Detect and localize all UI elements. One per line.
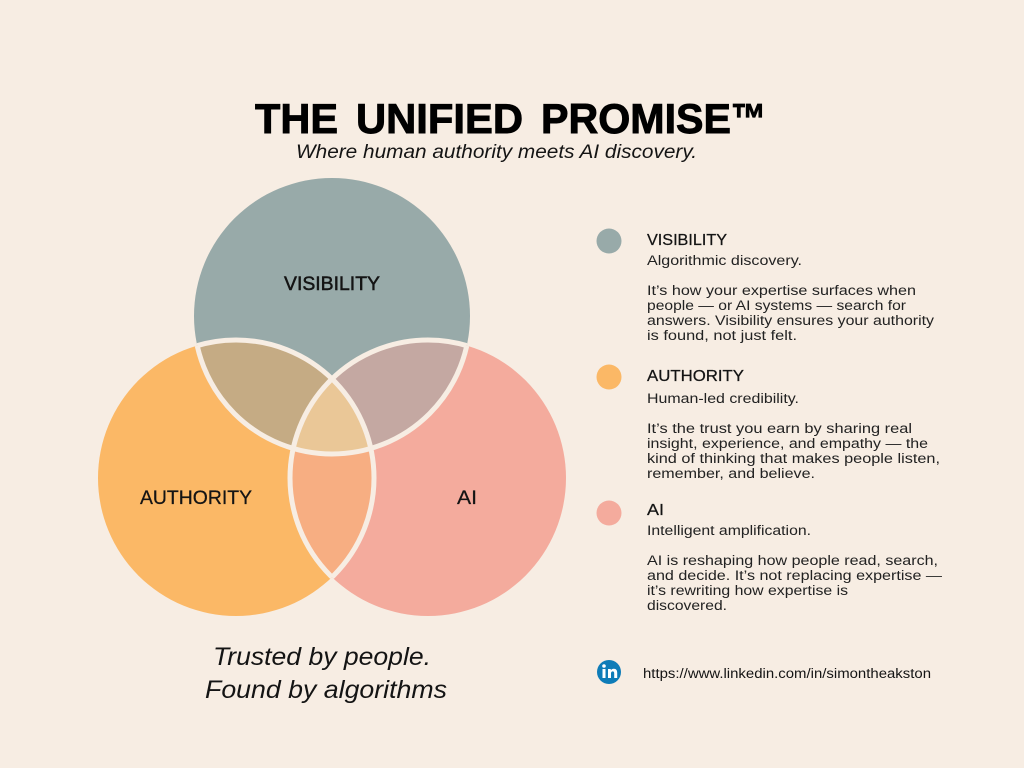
- overlap: authority and AI: [292, 452, 372, 574]
- subtitle: Where human authority meets AI discovery.: [296, 142, 697, 163]
- title: PROMISE: [541, 95, 731, 142]
- legend text: AI: AI is reshaping how people read, search,: [647, 553, 938, 568]
- label: visibility: VISIBILITY: [284, 273, 380, 295]
- title: [255, 95, 766, 142]
- title: THE: [255, 95, 338, 142]
- legend text: visibility: is found, not just felt.: [647, 328, 797, 343]
- title: UNIFIED: [356, 95, 523, 142]
- overlap: visibility and authority: [200, 342, 328, 446]
- legend text: AI: it’s rewriting how expertise is: [647, 583, 848, 598]
- legend text: AI: and decide. It’s not replacing expertise —: [647, 568, 943, 583]
- linkedin url: https://www.linkedin.com/in/simontheakston: [643, 666, 931, 681]
- tagline: Trusted by people.: [213, 643, 431, 671]
- legend text: authority: Human-led credibility.: [647, 391, 799, 406]
- legend text: authority: [647, 391, 940, 481]
- venn diagram: [98, 178, 566, 616]
- legend text: AI: [647, 523, 943, 613]
- legend text: visibility: Algorithmic discovery.: [647, 253, 802, 268]
- legend text: authority: remember, and believe.: [647, 466, 815, 481]
- title: ™: [731, 95, 766, 142]
- label: authority: AUTHORITY: [140, 487, 252, 509]
- legend text: authority: insight, experience, and empathy — the: [647, 436, 928, 451]
- legend item: AI: [596, 500, 943, 613]
- overlap: all three: [296, 382, 368, 452]
- tagline: [205, 643, 447, 704]
- legend text: visibility: answers. Visibility ensures your authority: [647, 313, 934, 328]
- legend dot: AI: [596, 500, 622, 526]
- legend text: authority: kind of thinking that makes people listen,: [647, 451, 940, 466]
- legend heading: authority: AUTHORITY: [647, 368, 744, 385]
- tagline: Found by algorithms: [205, 676, 447, 704]
- legend text: AI: discovered.: [647, 598, 727, 613]
- overlap: visibility and AI: [336, 342, 464, 446]
- legend dot: visibility: [596, 228, 622, 254]
- legend text: visibility: people — or AI systems — search for: [647, 298, 907, 313]
- icon: linkedin: [597, 660, 621, 684]
- label: AI: AI: [457, 487, 477, 509]
- circle: visibility: [194, 178, 470, 454]
- legend heading: AI: AI: [647, 502, 664, 519]
- legend text: authority: It’s the trust you earn by sharing real: [647, 421, 912, 436]
- legend text: visibility: It’s how your expertise surfaces when: [647, 283, 916, 298]
- legend item: visibility: [596, 228, 934, 343]
- circle: authority: [98, 340, 374, 616]
- legend text: AI: Intelligent amplification.: [647, 523, 811, 538]
- circle: AI: [290, 340, 566, 616]
- legend text: visibility: [647, 253, 934, 343]
- legend dot: authority: [596, 364, 622, 390]
- legend item: authority: [596, 364, 940, 481]
- legend heading: visibility: VISIBILITY: [647, 232, 727, 249]
